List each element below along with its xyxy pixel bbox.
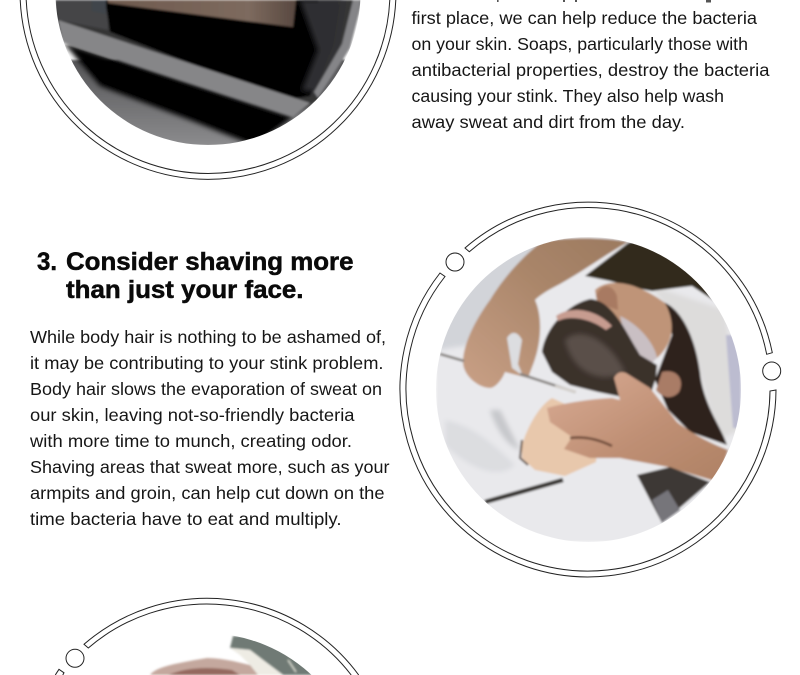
shaving photo — [436, 237, 741, 542]
ring node: upper left — [446, 253, 464, 271]
tip 2 body text: antibacterial properties, destroy the bacteria — [412, 60, 770, 80]
ear — [656, 371, 681, 397]
tip 3 heading — [37, 248, 354, 304]
tip 3 heading: 3. — [37, 248, 57, 276]
razor handle — [440, 352, 560, 388]
ring node: upper left — [66, 649, 84, 667]
tip 3 body text — [29, 327, 390, 529]
hair — [655, 302, 727, 445]
tip 3 body text: Shaving areas that sweat more, such as your — [30, 457, 390, 477]
tip 2 body text: on your skin. Soaps, particularly those with — [412, 34, 748, 54]
neck — [522, 398, 600, 476]
photo background — [436, 237, 741, 542]
tip 2 body text — [412, 0, 770, 132]
ring node: right — [763, 362, 781, 380]
tip 3 body text: with more time to munch, creating odor. — [29, 431, 352, 451]
tip 3 body text: it may be contributing to your stink problem. — [30, 353, 384, 373]
tip 2 body text: away sweat and dirt from the day. — [412, 112, 685, 132]
tip 3 heading: Consider shaving more — [66, 248, 354, 276]
tip 3 body text: armpits and groin, can help cut down on the — [30, 483, 385, 503]
bottom portrait photo — [150, 636, 312, 675]
tip 3 body text: Body hair slows the evaporation of sweat on — [30, 379, 382, 399]
top soap photo — [55, 0, 365, 146]
tip 2 body text: causing your stink. They also help wash — [412, 86, 724, 106]
shaving hand — [547, 372, 728, 482]
bottom photo ring — [55, 598, 359, 675]
tip 3 body text: While body hair is nothing to be ashamed of, — [30, 327, 386, 347]
face — [595, 283, 672, 358]
tip 3 body text: our skin, leaving not-so-friendly bacteria — [30, 405, 355, 425]
tip 3 heading: than just your face. — [66, 276, 304, 304]
beard — [542, 299, 657, 399]
shaving photo ring — [400, 202, 781, 577]
dark vest — [637, 467, 710, 523]
top photo ring — [20, 0, 396, 179]
comb — [485, 480, 563, 502]
tip 2 body text: first place, we can help reduce the bacteria — [412, 8, 757, 28]
arm and hand — [463, 238, 628, 388]
tip 3 body text: time bacteria have to eat and multiply. — [30, 509, 342, 529]
razor tip — [555, 386, 576, 392]
